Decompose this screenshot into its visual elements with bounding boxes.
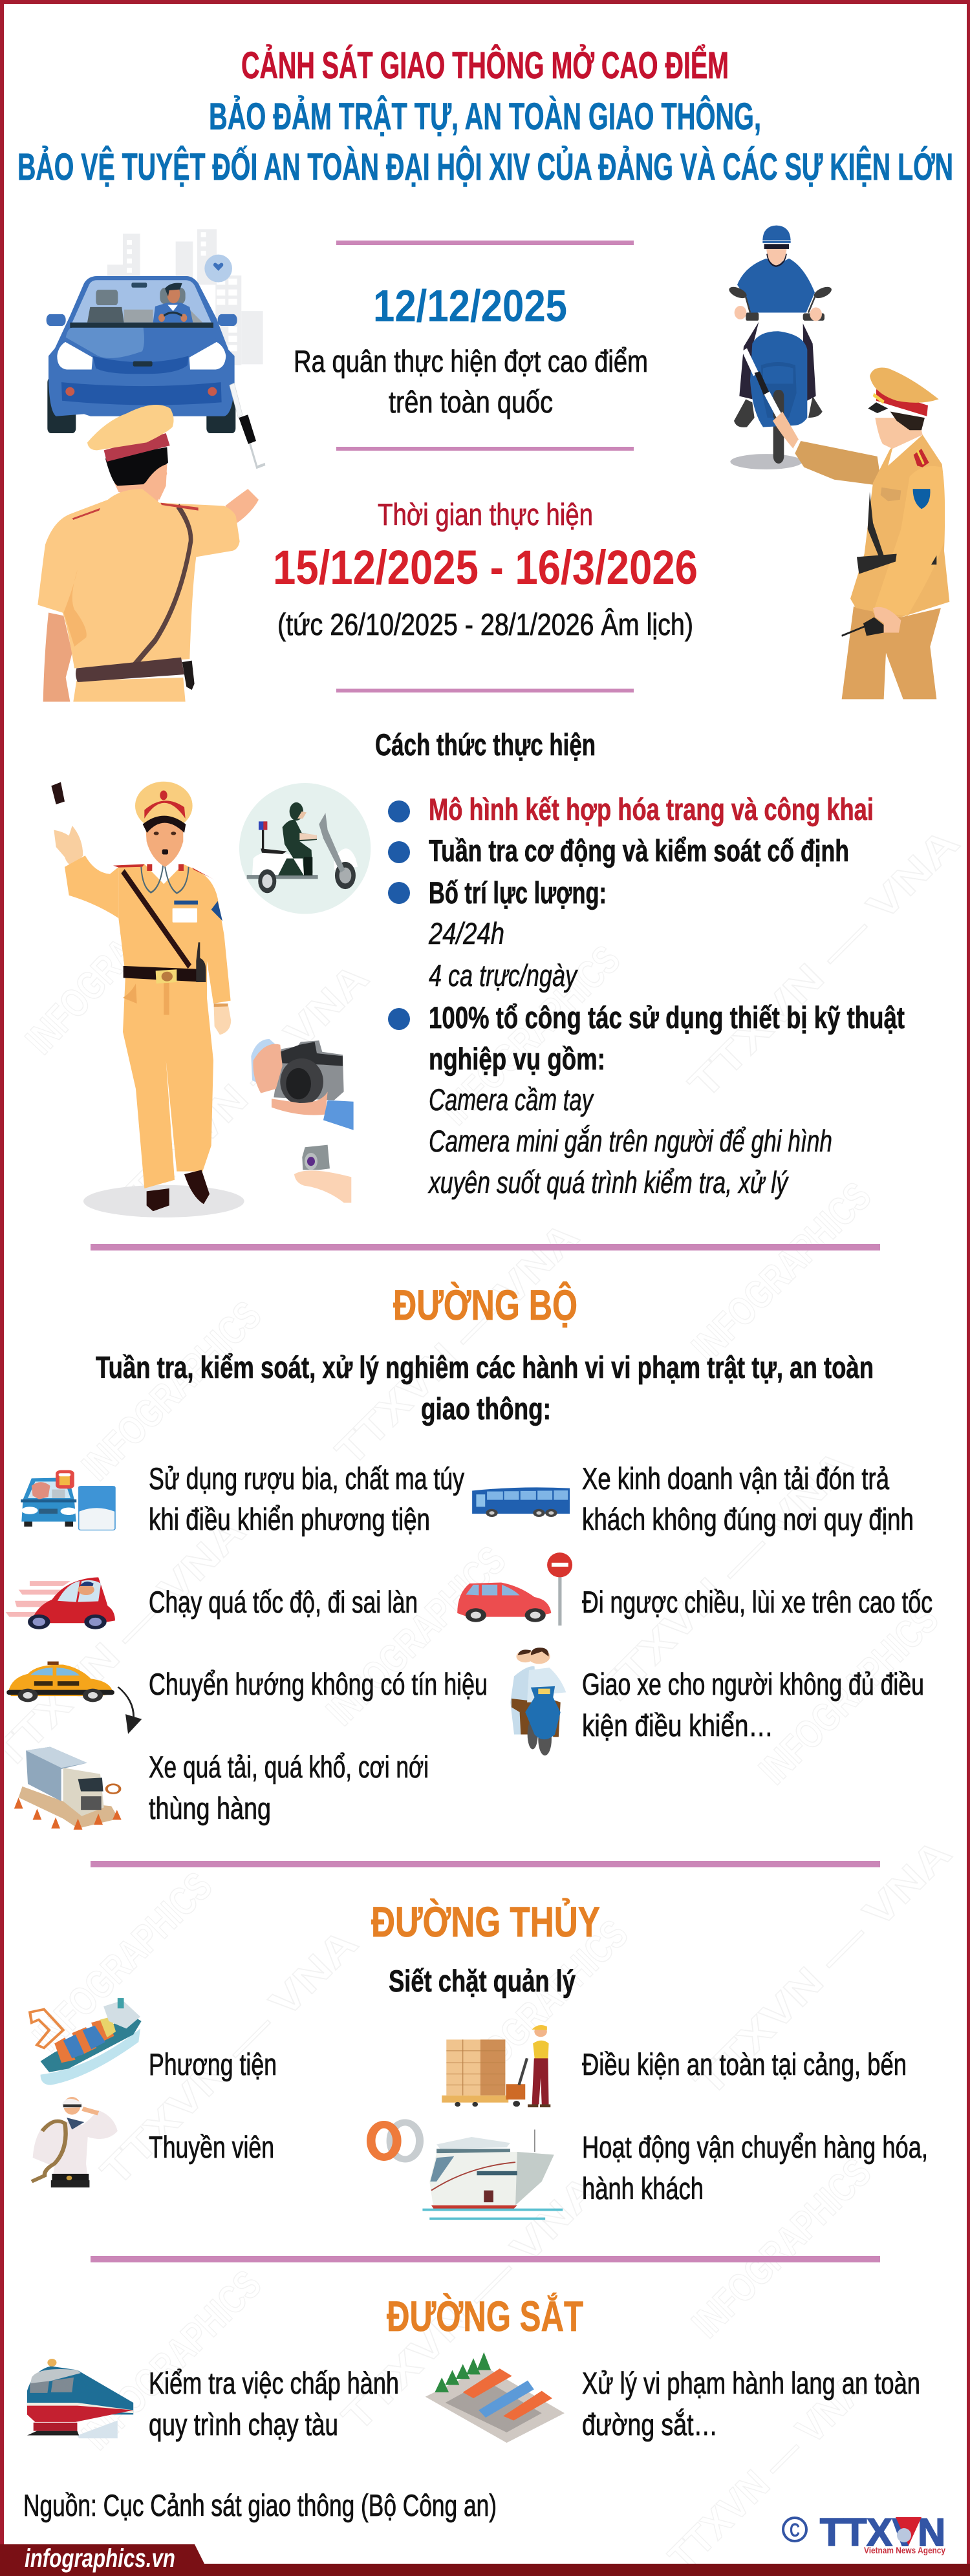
implementation period block: (tức 26/10/2025 - 28/1/2026 Âm lịch) [277, 607, 693, 641]
waterway item: life rings and cruise ship: hành khách [582, 2171, 704, 2206]
railway item: train: Kiểm tra việc chấp hành [149, 2366, 399, 2400]
waterway item: crew: Thuyền viên [149, 2130, 274, 2164]
text: TTXVN — VNA [327, 1214, 587, 1474]
launch date block: trên toàn quốc [389, 385, 553, 419]
launch date block: Ra quân thực hiện đợt cao điểm [294, 344, 648, 378]
road item: overload: Xe quá tải, quá khổ, cơi nới [149, 1750, 429, 1784]
illustration: traffic officer from behind with baton [38, 383, 265, 702]
section heading: railway: ĐƯỜNG SẮT [387, 2292, 583, 2340]
text: INFOGRAPHICS [17, 862, 209, 1063]
launch date block [294, 281, 648, 419]
road item: underage rider [510, 1648, 924, 1755]
road item: speeding: Chạy quá tốc độ, đi sai làn [149, 1585, 418, 1619]
road item: no signal [6, 1662, 488, 1702]
text: INFOGRAPHICS [74, 2262, 270, 2458]
road item: passenger transport [472, 1461, 914, 1536]
waterway item: life rings and cruise ship [371, 2123, 928, 2218]
text: TTXVN — VNA [334, 2166, 608, 2440]
bullet: technical equipment: Camera mini gắn trên người để ghi hình [429, 1124, 832, 1158]
road item: alcohol and drugs [21, 1461, 464, 1536]
section heading: waterway: ĐƯỜNG THỦY [371, 1898, 600, 1946]
bullet: technical equipment: nghiệp vụ gồm: [429, 1042, 605, 1076]
railway item: station: đường sắt… [582, 2407, 718, 2442]
text: TTXVN — VNA [686, 1830, 960, 2105]
waterway item: vessels [30, 1998, 277, 2085]
road item: speeding [6, 1577, 418, 1629]
text: TTXVN — VNA [117, 956, 377, 1216]
railway item: train [27, 2359, 399, 2442]
road item: wrong way [457, 1552, 932, 1626]
road intro text [96, 1350, 874, 1426]
logo: TTXVN: C [790, 2520, 800, 2541]
illustration: motorbike rider [728, 226, 832, 469]
implementation period block [273, 497, 698, 641]
launch date block: 12/12/2025 [373, 281, 567, 331]
bullet: force arrangement: 4 ca trực/ngày [429, 958, 578, 993]
bullet: force arrangement: Bố trí lực lượng: [429, 875, 607, 910]
bullet: technical equipment: xuyên suốt quá trình kiểm tra, xử lý [427, 1165, 789, 1199]
bullet: technical equipment [388, 1000, 905, 1199]
footer band [0, 2544, 970, 2576]
text: INFOGRAPHICS [440, 1912, 636, 2108]
waterway intro: Siết chặt quản lý [389, 1964, 576, 1998]
logo: TTXVN: TTXVN [820, 2511, 945, 2554]
text: TTXVN — VNA [660, 2365, 875, 2576]
heading: how it is done: Cách thức thực hiện [375, 727, 596, 762]
text: INFOGRAPHICS [684, 1174, 879, 1370]
road item: alcohol and drugs: Sử dụng rượu bia, chất ma túy [149, 1461, 464, 1496]
bullet: force arrangement: 24/24h [428, 916, 504, 950]
text: INFOGRAPHICS [74, 1293, 270, 1489]
arrow: turning [118, 1687, 142, 1734]
illustration: ring mini camera [294, 1145, 351, 1203]
illustration: blue car with buildings [47, 229, 263, 433]
illustration: traffic officer side view [773, 368, 949, 699]
title [17, 45, 953, 188]
bullet: technical equipment: Camera cầm tay [429, 1082, 594, 1117]
text: TTXVN — VNA [92, 1920, 367, 2195]
waterway item: ports [442, 2025, 907, 2107]
road item: no signal: Chuyển hướng không có tín hiệu [149, 1667, 488, 1701]
road item: overload [14, 1747, 429, 1830]
road item: underage rider: kiện điều khiển… [582, 1708, 773, 1743]
road item: overload: thùng hàng [149, 1791, 271, 1825]
bullet: mobile patrol: Tuần tra cơ động và kiểm soát cố định [429, 833, 849, 868]
text: INFOGRAPHICS [433, 938, 629, 1133]
waterway item: crew [32, 2097, 274, 2187]
text: TTXVN — VNA [587, 1441, 861, 1715]
bullet: force arrangement [388, 875, 607, 993]
road intro text: giao thông: [421, 1391, 551, 1426]
road item: passenger transport: Xe kinh doanh vận tải đón trả [582, 1461, 890, 1496]
railway item: station [426, 2352, 920, 2443]
footer band: infographics.vn [25, 2544, 175, 2573]
text: INFOGRAPHICS [684, 2151, 879, 2346]
section heading: road: ĐƯỜNG BỘ [393, 1281, 577, 1329]
text: TTXVN — VNA [680, 820, 968, 1108]
illustration: handheld camera [251, 1039, 354, 1130]
implementation period block: Thời gian thực hiện [378, 497, 593, 531]
text: INFOGRAPHICS [318, 1538, 514, 1734]
source note: Nguồn: Cục Cảnh sát giao thông (Bộ Công an) [23, 2488, 497, 2522]
implementation period block: 15/12/2025 - 16/3/2026 [273, 541, 698, 594]
illustration: motorcycle patrol in circle [239, 783, 371, 914]
logo: TTXVN: Vietnam News Agency [864, 2545, 945, 2555]
bullet list [388, 792, 905, 1199]
illustration: officer blowing whistle [51, 782, 244, 1218]
waterway item: vessels: Phương tiện [149, 2047, 277, 2081]
text: INFOGRAPHICS [25, 1864, 221, 2060]
railway item: train: quy trình chạy tàu [149, 2407, 338, 2442]
title: CẢNH SÁT GIAO THÔNG MỞ CAO ĐIỂM [241, 45, 729, 87]
road item: alcohol and drugs: khi điều khiển phương tiện [149, 1502, 430, 1536]
